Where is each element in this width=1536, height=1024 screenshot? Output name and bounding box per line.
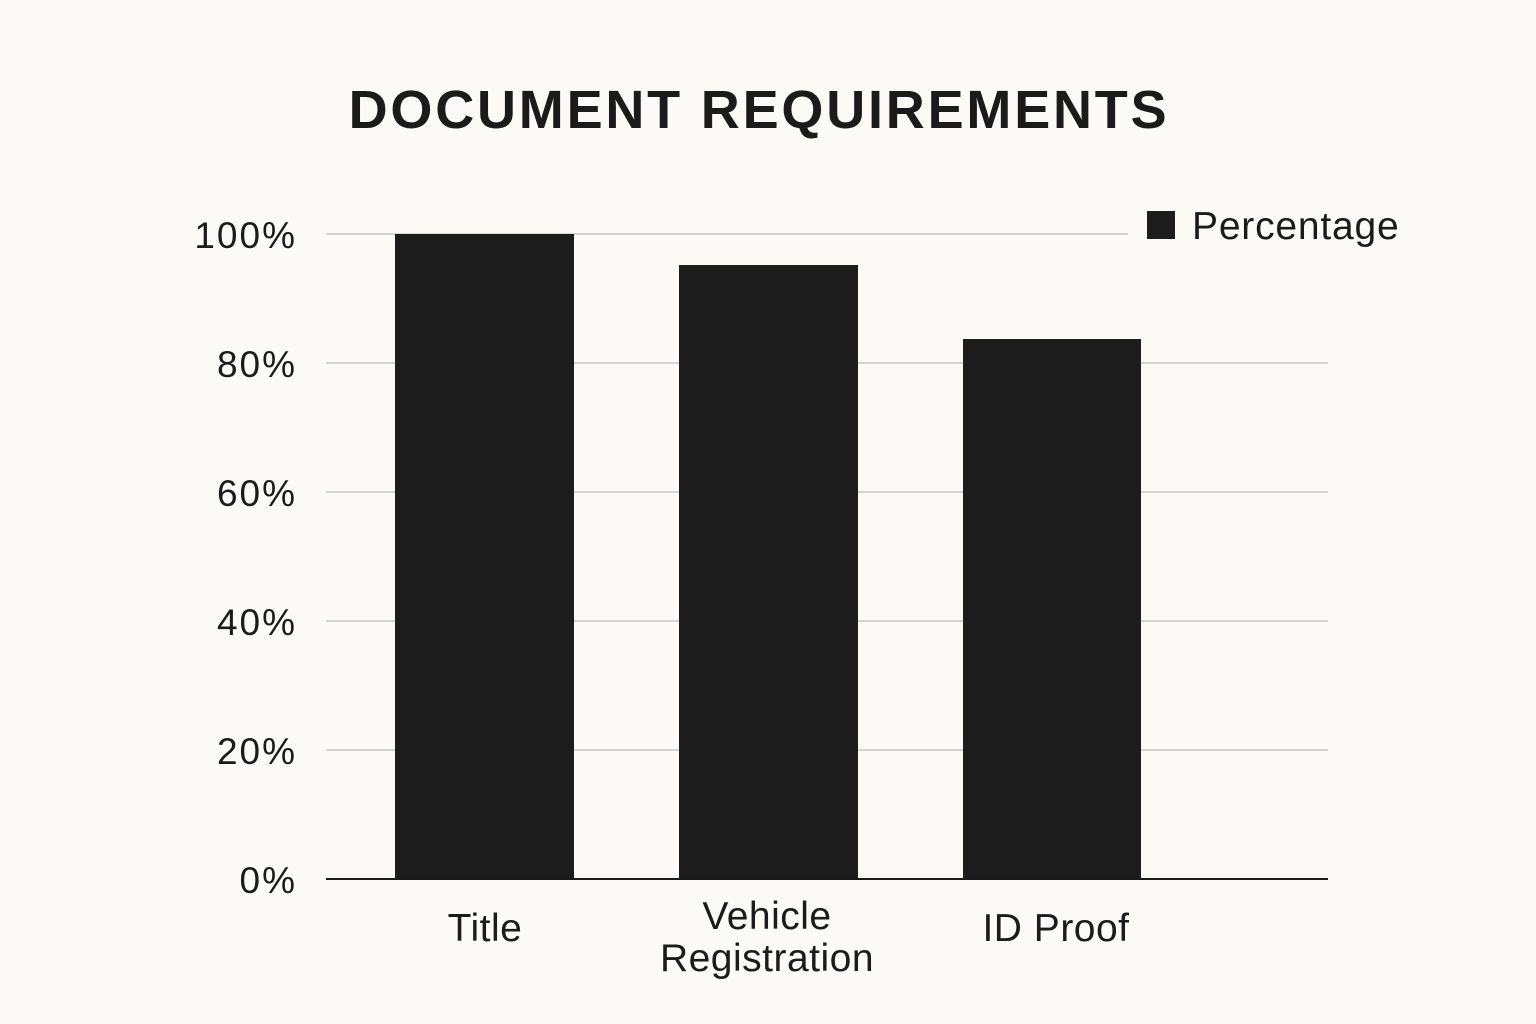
y-axis labels: 80% [217,344,297,385]
title: DOCUMENT REQUIREMENTS [349,80,1169,140]
bar: Vehicle Registration [679,265,858,879]
x-axis labels: ID Proof [982,907,1130,950]
bar: Title [395,234,574,879]
bar: ID Proof [963,339,1141,879]
legend: Percentage [1192,205,1399,248]
y-axis labels: 20% [217,731,297,772]
y-axis labels: 0% [240,860,297,901]
x axis [326,878,1328,880]
y-axis labels: 100% [194,215,297,256]
y-axis labels [194,215,297,901]
x-axis labels: Registration [660,937,874,980]
x-axis labels [448,895,1130,980]
x-axis labels: Vehicle [702,895,832,938]
y-axis labels: 60% [217,473,297,514]
x-axis labels: Title [448,907,522,950]
y-axis labels: 40% [217,602,297,643]
bar chart [395,234,1141,879]
